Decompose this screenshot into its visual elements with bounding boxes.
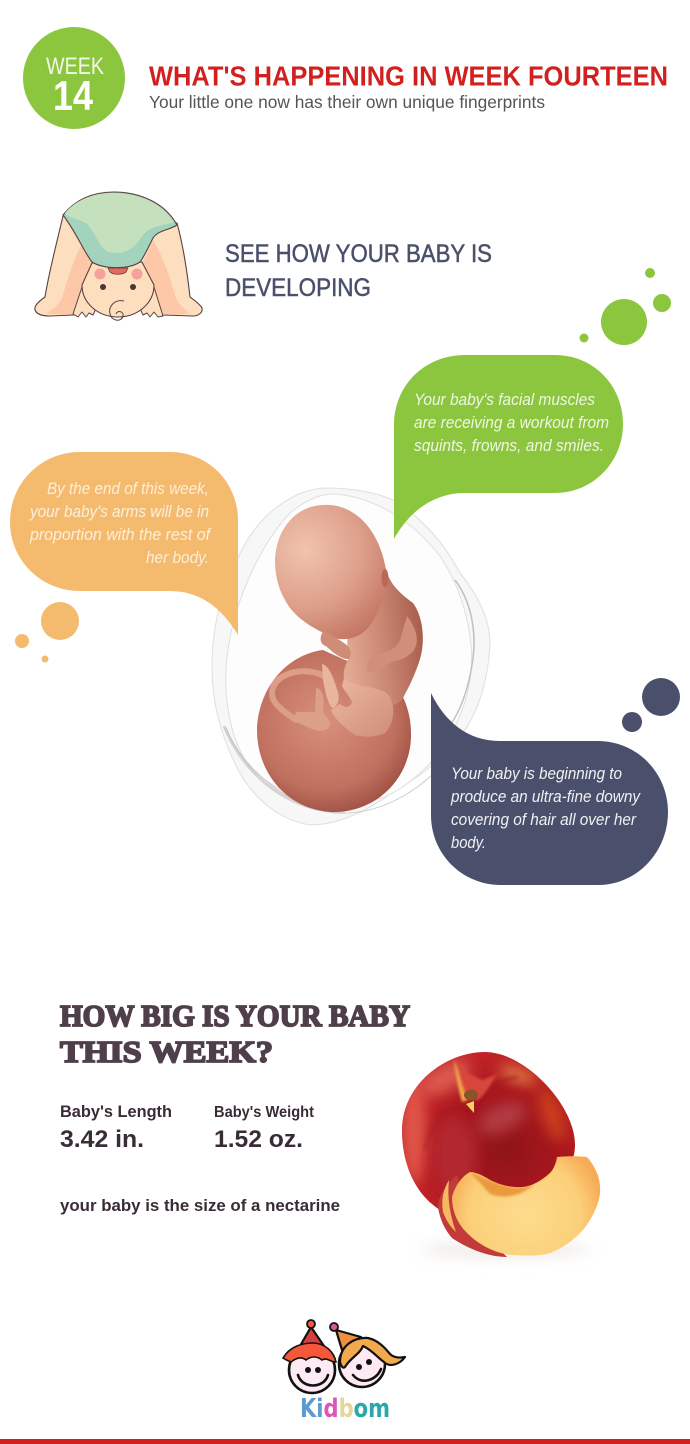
speech bubble: arms: your baby's arms will be in — [29, 502, 209, 521]
stat: baby's length — [60, 1102, 172, 1153]
footer bar — [0, 1439, 690, 1444]
logo: girl face — [339, 1341, 385, 1387]
logo: girl eyes and smile — [353, 1359, 381, 1381]
section heading: SEE HOW YOUR BABY IS — [225, 240, 492, 268]
fetus ear — [382, 569, 388, 587]
speech bubble: facial muscles — [394, 355, 623, 539]
week badge: 14 — [53, 72, 94, 119]
speech bubble: facial muscles: are receiving a workout from — [414, 413, 609, 432]
subtitle: Your little one now has their own unique fingerprints — [149, 92, 545, 112]
speech bubble: hair: produce an ultra-fine downy — [450, 787, 641, 806]
fetus illustration — [257, 505, 423, 812]
logo: girl hat — [336, 1330, 361, 1350]
fetus torso — [344, 565, 423, 706]
speech bubble: arms: her body. — [146, 548, 209, 567]
logo: boy hat — [300, 1327, 324, 1346]
nectarine slice skin — [438, 1175, 507, 1257]
week badge: WEEK — [46, 53, 104, 80]
speech bubble: arms — [10, 452, 238, 635]
fetus head — [275, 505, 386, 639]
size heading: THIS WEEK? — [60, 1034, 273, 1069]
speech bubble: hair: covering of hair all over her — [451, 810, 637, 829]
umbilical cord — [272, 671, 326, 720]
logo wordmark: Kidbom — [300, 1394, 390, 1424]
decorative orange dots — [15, 602, 79, 662]
stat: baby's weight: 1.52 oz. — [214, 1126, 303, 1153]
stat: baby's length: 3.42 in. — [60, 1126, 144, 1153]
decorative green dots — [580, 268, 671, 345]
fetus near arm and hand — [367, 616, 417, 673]
nectarine slice flesh — [452, 1156, 600, 1256]
stat: baby's length: Baby's Length — [60, 1102, 172, 1121]
speech bubble: hair: Your baby is beginning to — [451, 764, 622, 783]
section heading — [225, 240, 492, 302]
nectarine shadow — [420, 1242, 590, 1258]
icon: baby looking through legs — [35, 192, 202, 320]
logo: girl hair — [340, 1338, 405, 1368]
size heading — [60, 998, 410, 1069]
stat: baby's weight — [214, 1104, 314, 1153]
logo: girl pompom — [330, 1323, 338, 1331]
logo: Kidbom — [283, 1320, 405, 1424]
fetus far hand — [321, 632, 351, 659]
speech bubble: arms: proportion with the rest of — [29, 525, 212, 544]
nectarine body — [402, 1052, 575, 1209]
section heading: DEVELOPING — [225, 274, 371, 302]
week badge — [23, 27, 125, 129]
logo: boy face — [289, 1347, 335, 1393]
fetus rump and lower body — [257, 650, 411, 812]
logo: boy eyes and smile — [298, 1367, 328, 1386]
speech bubble: hair: body. — [451, 833, 486, 852]
decorative navy dots — [622, 678, 680, 732]
fetus legs — [331, 678, 393, 737]
speech bubble: facial muscles: Your baby's facial muscles — [414, 390, 595, 409]
stat: baby's weight: Baby's Weight — [214, 1104, 314, 1121]
size comparison caption: your baby is the size of a nectarine — [60, 1196, 340, 1215]
icon: nectarine — [395, 1045, 605, 1260]
logo: boy hair — [283, 1343, 336, 1362]
speech bubble: facial muscles: squints, frowns, and smiles. — [414, 436, 604, 455]
amniotic membrane — [212, 488, 490, 825]
size heading: HOW BIG IS YOUR BABY — [60, 998, 410, 1033]
speech bubble: hair — [431, 693, 668, 885]
logo: boy pompom — [307, 1320, 315, 1328]
speech bubble: arms: By the end of this week, — [47, 479, 209, 498]
